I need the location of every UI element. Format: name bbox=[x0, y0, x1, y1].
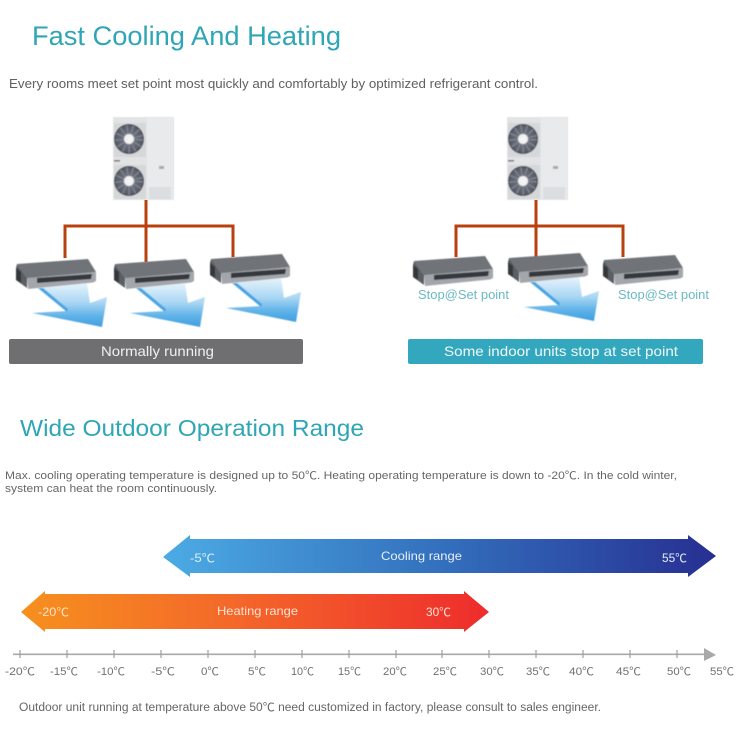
arrow: heating range: Heating range bbox=[217, 604, 298, 618]
temperature axis: 0℃ bbox=[201, 666, 219, 678]
icon: indoor unit 3 with airflow bbox=[210, 254, 301, 322]
arrow: cooling range: -5℃ bbox=[190, 553, 216, 565]
arrow: cooling range bbox=[163, 535, 716, 577]
label bar: some indoor units stop: Some indoor units stop at set point bbox=[444, 343, 678, 359]
temperature axis: 40℃ bbox=[569, 666, 594, 678]
panel: some indoor units stop bbox=[408, 117, 710, 364]
arrow: cooling range: Cooling range bbox=[381, 549, 462, 563]
temperature axis: 10℃ bbox=[291, 666, 314, 678]
heading: Wide Outdoor Operation Range: Wide Outdoor Operation Range bbox=[20, 415, 364, 441]
label bar: some indoor units stop bbox=[408, 339, 703, 364]
arrow: heating range: -20℃ bbox=[38, 607, 70, 619]
temperature axis: -5℃ bbox=[151, 666, 175, 678]
description text bbox=[5, 470, 677, 495]
temperature axis: -15℃ bbox=[50, 666, 78, 678]
arrow: cooling range: 55℃ bbox=[662, 553, 688, 565]
description text: system can heat the room continuously. bbox=[5, 483, 217, 495]
icon: indoor unit 1 with airflow bbox=[16, 259, 107, 327]
icon: indoor unit running with airflow bbox=[508, 253, 599, 321]
label bar: normally running bbox=[9, 339, 303, 364]
icon: indoor unit stopped 2 bbox=[603, 255, 683, 285]
temperature axis: 35℃ bbox=[526, 666, 550, 678]
arrow: heating range: 30℃ bbox=[426, 607, 452, 619]
temperature axis: 5℃ bbox=[248, 666, 266, 678]
intro text: Every rooms meet set point most quickly and comfortably by optimized refrigerant control. bbox=[9, 77, 538, 91]
footnote: Outdoor unit running at temperature above 50℃ need customized in factory, please consult to sales engineer. bbox=[19, 702, 601, 714]
label: stop at set point 1: Stop@Set point bbox=[418, 288, 510, 302]
arrow: heating range bbox=[21, 591, 489, 632]
title: Fast Cooling And Heating: Fast Cooling And Heating bbox=[32, 21, 341, 51]
icon: outdoor unit right bbox=[507, 117, 568, 200]
temperature axis: 25℃ bbox=[433, 666, 457, 678]
panel: normally running bbox=[9, 117, 303, 364]
refrigerant pipes right bbox=[456, 200, 623, 257]
icon: indoor unit stopped 1 bbox=[413, 256, 493, 286]
description text: Max. cooling operating temperature is designed up to 50℃. Heating operating temperature is down to -20℃. In the cold winter, bbox=[5, 470, 677, 482]
temperature axis bbox=[5, 648, 734, 678]
temperature axis: -10℃ bbox=[97, 666, 125, 678]
temperature axis: 45℃ bbox=[616, 666, 641, 678]
icon: outdoor unit left bbox=[113, 117, 174, 200]
temperature axis: 30℃ bbox=[480, 666, 504, 678]
temperature axis: 15℃ bbox=[338, 666, 361, 678]
temperature axis: 20℃ bbox=[383, 666, 407, 678]
temperature axis: 55℃ bbox=[710, 666, 734, 678]
temperature axis: 50℃ bbox=[667, 666, 691, 678]
refrigerant pipes left bbox=[65, 200, 233, 262]
label: stop at set point 2: Stop@Set point bbox=[618, 288, 710, 302]
label bar: normally running: Normally running bbox=[101, 343, 214, 359]
temperature axis: -20℃ bbox=[5, 666, 35, 678]
icon: indoor unit 2 with airflow bbox=[114, 259, 205, 327]
